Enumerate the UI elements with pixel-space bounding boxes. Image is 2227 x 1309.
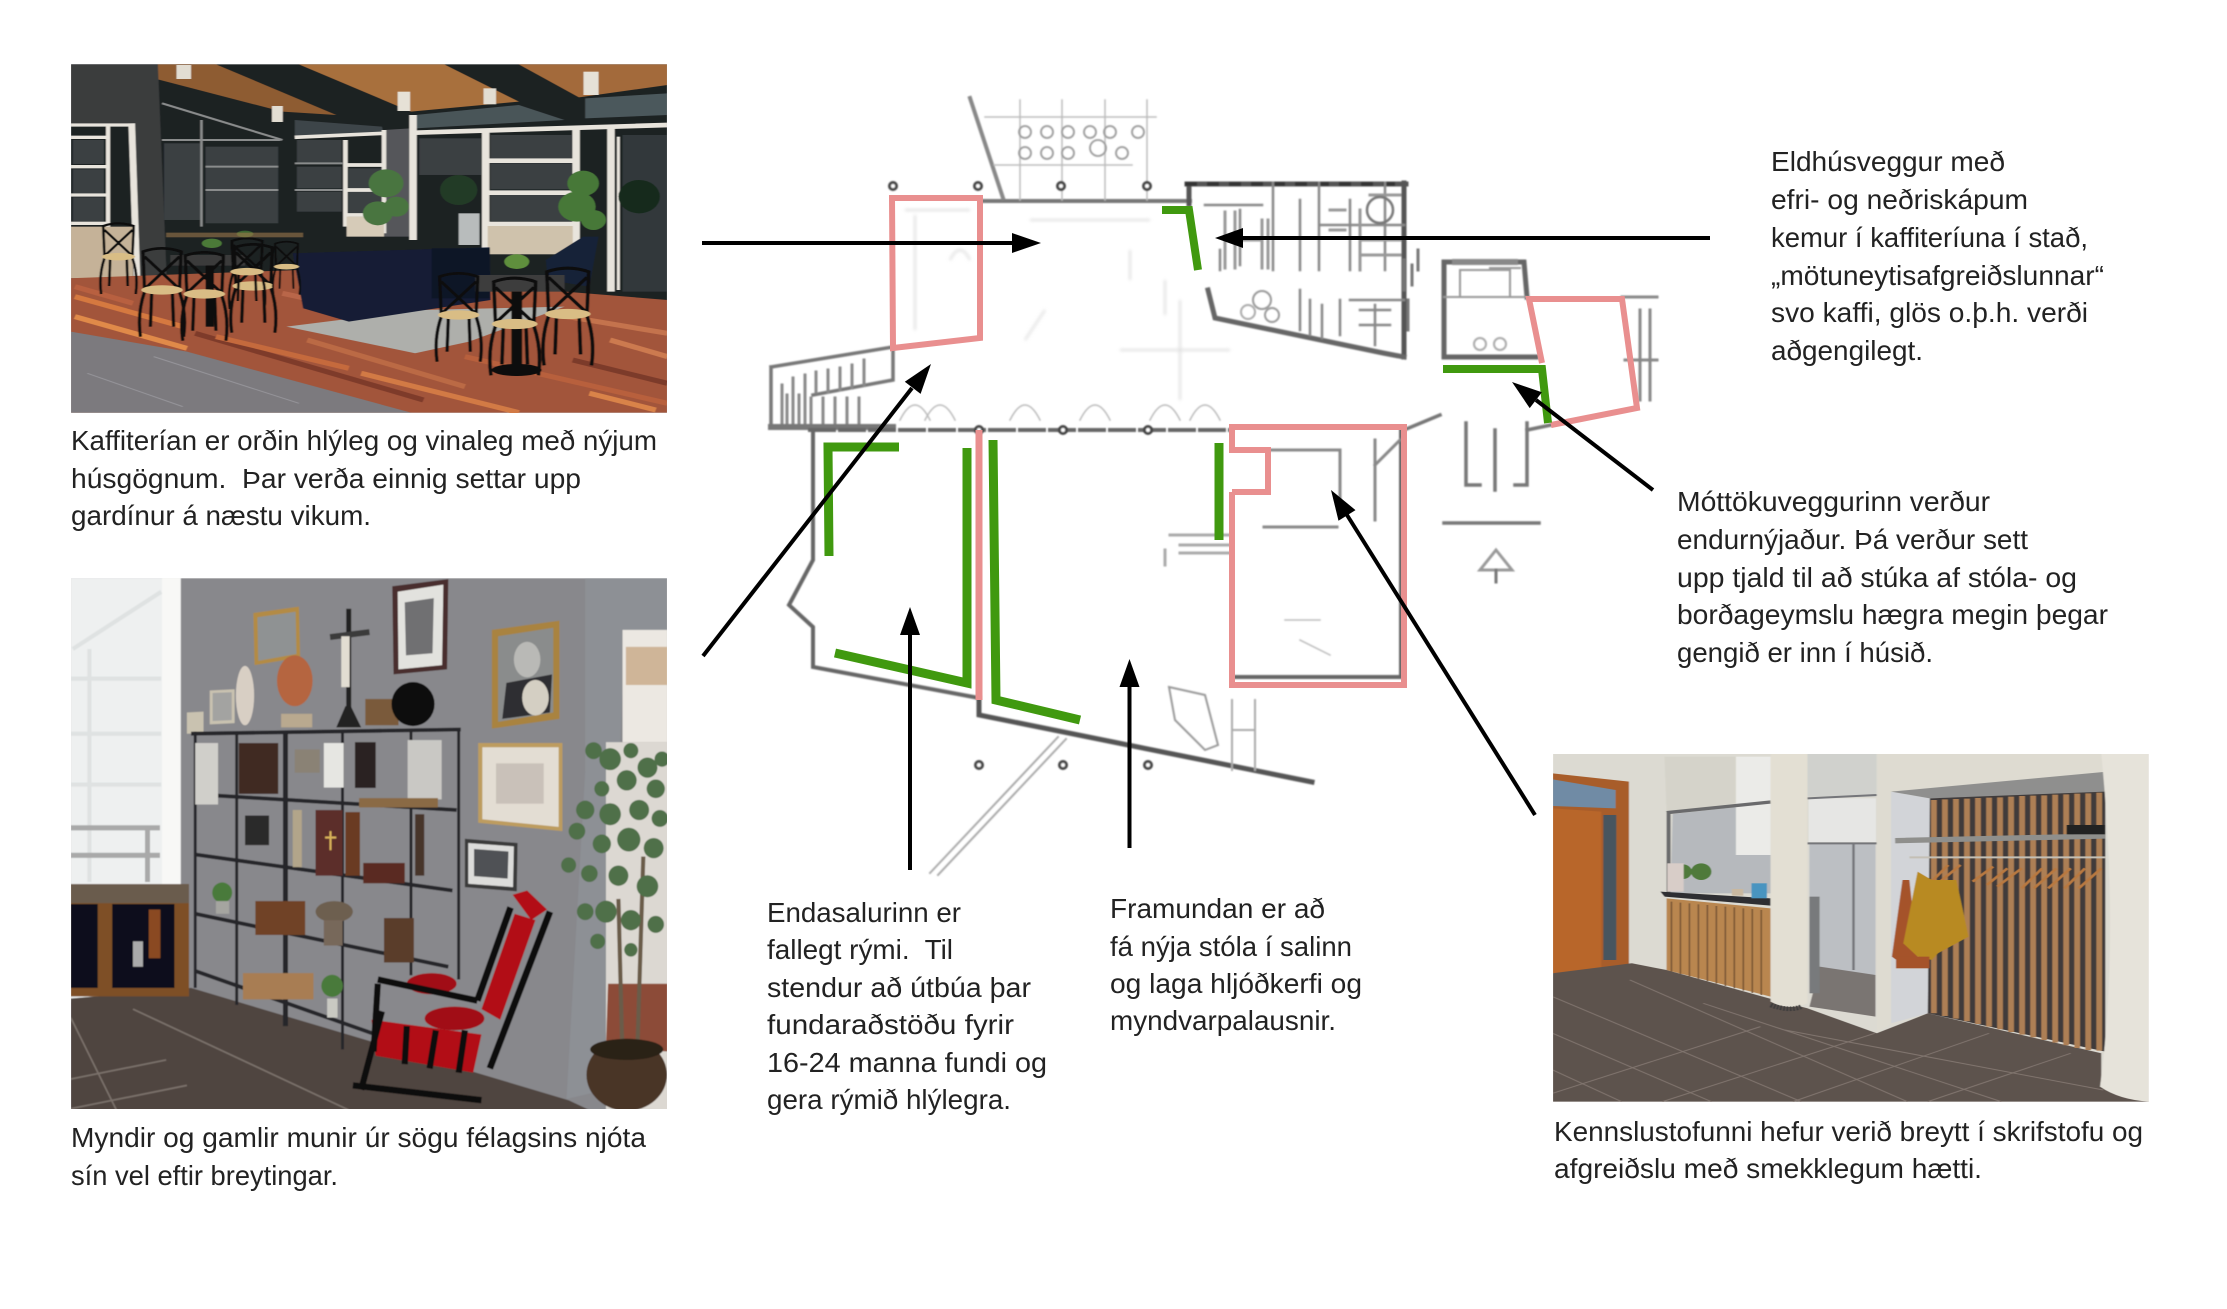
text: end hall: Endasalurinn er <box>767 897 961 928</box>
arrow: main hall <box>1120 659 1140 848</box>
indoor plants <box>363 169 660 230</box>
caption: office reception: Kennslustofunni hefur verið breytt í skrifstofu og <box>1554 1116 2143 1147</box>
arrow: cafeteria caption to hall <box>702 233 1041 253</box>
antique trunk <box>71 884 189 996</box>
text: end hall: 16-24 manna fundi og <box>767 1047 1047 1078</box>
text: main hall: Framundan er að <box>1110 893 1325 924</box>
text: reception wall: gengið er inn í húsið. <box>1677 637 1933 668</box>
wooden entrance door <box>1553 773 1629 973</box>
coat alcove <box>1877 753 2107 1052</box>
tiled floor <box>71 988 589 1110</box>
text: kitchen wall: svo kaffi, glös o.þ.h. verði <box>1771 297 2088 328</box>
plan: faint furniture in hall <box>905 210 1230 400</box>
text: end hall: gera rýmið hlýlegra. <box>767 1084 1011 1115</box>
sofa <box>293 237 598 322</box>
text: kitchen wall: kemur í kaffiteríuna í stað, <box>1771 222 2088 253</box>
tables and chairs right <box>436 254 593 376</box>
wall and window <box>71 578 667 1111</box>
wooden ceiling <box>158 64 667 138</box>
wooden floor <box>71 270 667 413</box>
text: kitchen wall: efri- og neðriskápum <box>1771 184 2028 215</box>
right column <box>2100 753 2149 1102</box>
central column and corridor <box>1771 753 1877 1017</box>
floor plan <box>771 98 1657 875</box>
caption: cafeteria <box>71 425 657 531</box>
text: main hall: myndvarpalausnir. <box>1110 1005 1336 1036</box>
text: kitchen wall <box>1771 146 2104 366</box>
photo: cafeteria <box>71 64 667 413</box>
text: reception wall: Móttökuveggurinn verður <box>1677 486 1990 517</box>
plan drawing: grey walls <box>771 98 1657 875</box>
wall panels <box>71 135 667 292</box>
text: reception wall <box>1677 486 2108 668</box>
text: end hall: fundaraðstöðu fyrir <box>767 1009 1014 1040</box>
pink outlines: rooms <box>892 198 1637 700</box>
text: reception wall: borðageymslu hægra megin þegar <box>1677 599 2108 630</box>
caption: memorabilia: Myndir og gamlir munir úr sögu félagsins njóta <box>71 1122 646 1153</box>
text: reception wall: upp tjald til að stúka af stóla- og <box>1677 562 2077 593</box>
reception counter <box>1660 863 1771 997</box>
photo: office reception <box>1553 753 2149 1102</box>
caption: memorabilia: sín vel eftir breytingar. <box>71 1160 338 1191</box>
red rocking chair <box>353 890 550 1100</box>
tiled floor <box>1553 963 2149 1102</box>
caption: office reception <box>1554 1116 2143 1184</box>
text: reception wall: endurnýjaður. Þá verður sett <box>1677 524 2028 555</box>
text: main hall: fá nýja stóla í salinn <box>1110 931 1352 962</box>
caption: office reception: afgreiðslu með smekklegum hætti. <box>1554 1153 1982 1184</box>
shelf items <box>195 740 442 1018</box>
text: main hall <box>1110 893 1362 1036</box>
text: end hall: stendur að útbúa þar <box>767 972 1031 1003</box>
text: end hall <box>767 897 1047 1115</box>
window reflections <box>73 135 572 223</box>
arrow: office <box>1331 490 1535 815</box>
caption: cafeteria: húsgögnum. Þar verða einnig settar upp <box>71 463 581 494</box>
caption: cafeteria: gardínur á næstu vikum. <box>71 500 371 531</box>
grey column <box>71 64 167 287</box>
photo: memorabilia shelf <box>71 578 669 1111</box>
rug <box>286 307 564 353</box>
arrow: kitchen wall <box>1215 228 1710 248</box>
text: kitchen wall: Eldhúsveggur með <box>1771 146 2005 177</box>
grey walkway <box>71 332 411 413</box>
framed pictures <box>187 579 562 891</box>
arrow: reception wall <box>1512 382 1653 490</box>
caption: memorabilia <box>71 1122 646 1191</box>
window frames <box>71 103 667 308</box>
text: kitchen wall: „mötuneytisafgreiðslunnar“ <box>1771 260 2104 291</box>
caption: cafeteria: Kaffiterían er orðin hlýleg og vinaleg með nýjum <box>71 425 657 456</box>
text: main hall: og laga hljóðkerfi og <box>1110 968 1362 999</box>
text: end hall: fallegt rými. Til <box>767 934 953 965</box>
text: kitchen wall: aðgengilegt. <box>1771 335 1923 366</box>
green lines: walls to change <box>828 210 1548 720</box>
indoor tree <box>561 742 669 1111</box>
arrow: memorabilia corner <box>703 364 931 656</box>
arrow: end hall <box>900 607 920 870</box>
walls <box>1553 753 2149 1102</box>
metal shelf <box>191 729 461 1049</box>
objects on top of shelf <box>236 609 435 727</box>
plan columns <box>890 182 1152 768</box>
tables and chairs left <box>100 223 303 341</box>
